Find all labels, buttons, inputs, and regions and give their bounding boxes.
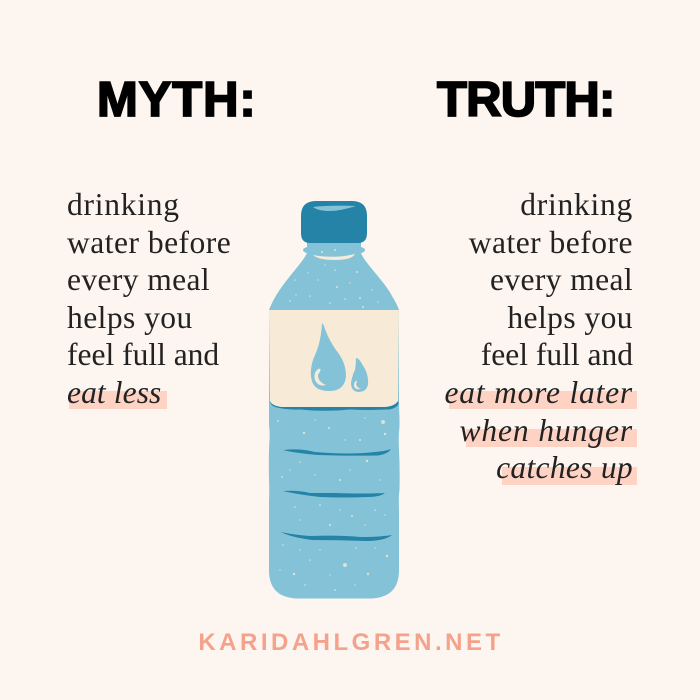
- label band shadow: [270, 400, 398, 411]
- text block: truth: every meal: [490, 262, 633, 297]
- heading: truth: TRUTH:: [437, 73, 615, 127]
- text block: truth: feel full and: [481, 337, 633, 372]
- text block: myth: drinking: [67, 187, 180, 222]
- text block: myth: helps you: [67, 300, 193, 335]
- heading: myth: MYTH:: [97, 73, 257, 127]
- text block: myth: eat less: [67, 375, 161, 410]
- text block: truth: when hunger: [459, 413, 633, 448]
- text block: myth: every meal: [67, 262, 210, 297]
- bottle cap: [301, 201, 367, 243]
- bottle speckles: [277, 249, 388, 591]
- text block: truth: [444, 187, 633, 485]
- bottle body: [269, 240, 400, 598]
- bottle label: [269, 310, 399, 407]
- icon: water drop large: [311, 323, 346, 391]
- highlight: catches up: [502, 467, 637, 485]
- icon: water drop small: [351, 358, 368, 392]
- highlight: eat less: [69, 391, 167, 409]
- text block: truth: water before: [469, 225, 633, 260]
- text block: truth: eat more later: [444, 375, 633, 410]
- text block: truth: catches up: [496, 450, 633, 485]
- text block: myth: [67, 187, 231, 410]
- bottle ridges: [281, 449, 392, 541]
- text block: myth: feel full and: [67, 337, 219, 372]
- neck highlight: [313, 254, 355, 260]
- highlight: eat more later: [449, 391, 637, 409]
- text block: truth: helps you: [507, 300, 633, 335]
- highlight: when hunger: [466, 429, 637, 447]
- footer: website: KARIDAHLGREN.NET: [198, 629, 504, 656]
- text block: myth: water before: [67, 225, 231, 260]
- text block: truth: drinking: [520, 187, 633, 222]
